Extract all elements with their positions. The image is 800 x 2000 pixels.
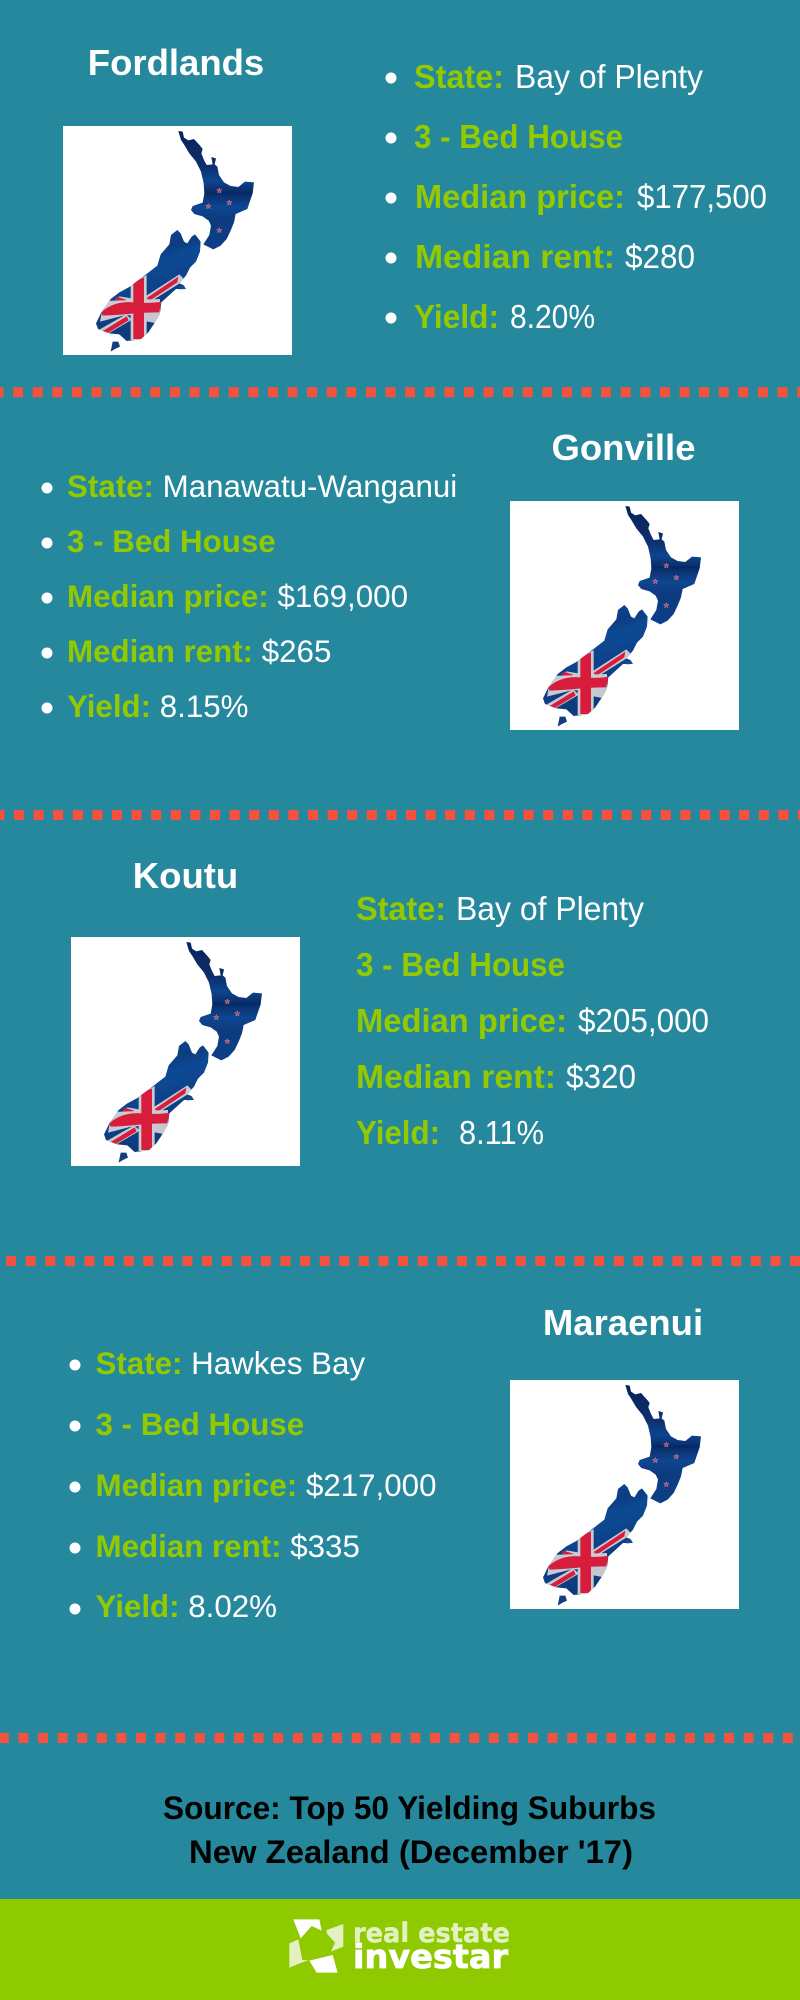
list: Fordlands details: Bay of Plenty (515, 58, 703, 95)
list: Fordlands details: Median rent: (415, 238, 615, 275)
list: Gonville details: Yield: 8.15% (67, 689, 248, 724)
panel: Maraenui (70, 1302, 739, 1624)
list: Fordlands details: $280 (625, 238, 695, 275)
source note: New Zealand (December '17) (189, 1834, 633, 1870)
heading: Gonville: Gonville (551, 427, 696, 468)
image: New Zealand flag map (510, 1380, 739, 1609)
list: Koutu details: Median price: (356, 1002, 567, 1039)
image: New Zealand flag map (63, 126, 292, 355)
list: Koutu details: State: (356, 890, 446, 927)
list: Fordlands details (386, 58, 767, 335)
list: Maraenui details: Median price: $217,000 (96, 1468, 436, 1503)
logo: Real Estate Investar (289, 1918, 510, 1976)
list: Gonville details: Median price: $169,000 (67, 579, 408, 614)
list: Koutu details (356, 890, 709, 1151)
list: Fordlands details: Median price: (415, 178, 625, 215)
list: Koutu details: 3 - Bed House (356, 946, 565, 983)
list: Koutu details: Bay of Plenty (456, 890, 644, 927)
heading: Maraenui: Maraenui (543, 1302, 703, 1343)
list: Maraenui details: Yield: 8.02% (96, 1589, 277, 1624)
wordmark (353, 1918, 510, 1976)
list: Fordlands details: 3 - Bed House (414, 118, 623, 155)
list: Gonville details (42, 469, 457, 724)
list: Koutu details: 8.11% (459, 1114, 544, 1151)
list: Koutu details: Yield: (356, 1114, 440, 1151)
list: Koutu details: $320 (566, 1058, 636, 1095)
list: Fordlands details: 8.20% (510, 298, 595, 335)
list: Maraenui details: 3 - Bed House (96, 1407, 304, 1442)
list: Fordlands details: State: (414, 58, 504, 95)
list: Maraenui details: State: Hawkes Bay (96, 1346, 365, 1381)
wordmark: real estate (353, 1918, 510, 1949)
source note (163, 1790, 656, 1870)
image: New Zealand flag map (510, 501, 739, 730)
list: Fordlands details: $177,500 (637, 178, 767, 215)
list: Maraenui details (70, 1346, 436, 1624)
list: Gonville details: State: Manawatu-Wanganui (67, 469, 457, 504)
heading: Fordlands: Fordlands (88, 42, 264, 83)
panel: Koutu (71, 855, 709, 1166)
image: New Zealand flag map (71, 937, 300, 1166)
list: Gonville details: 3 - Bed House (67, 524, 276, 559)
list: Fordlands details: Yield: (414, 298, 499, 335)
heading: Koutu: Koutu (133, 855, 238, 896)
list: Koutu details: $205,000 (578, 1002, 709, 1039)
icon: house mark (289, 1919, 343, 1973)
list: Koutu details: Median rent: (356, 1058, 556, 1095)
panel: Gonville (42, 427, 739, 730)
list: Gonville details: Median rent: $265 (67, 634, 331, 669)
wordmark: investar (353, 1937, 509, 1976)
footer bar (0, 1899, 800, 2000)
list: Maraenui details: Median rent: $335 (96, 1529, 360, 1564)
source note: Source: Top 50 Yielding Suburbs (163, 1790, 656, 1826)
panel: Fordlands (63, 42, 767, 355)
